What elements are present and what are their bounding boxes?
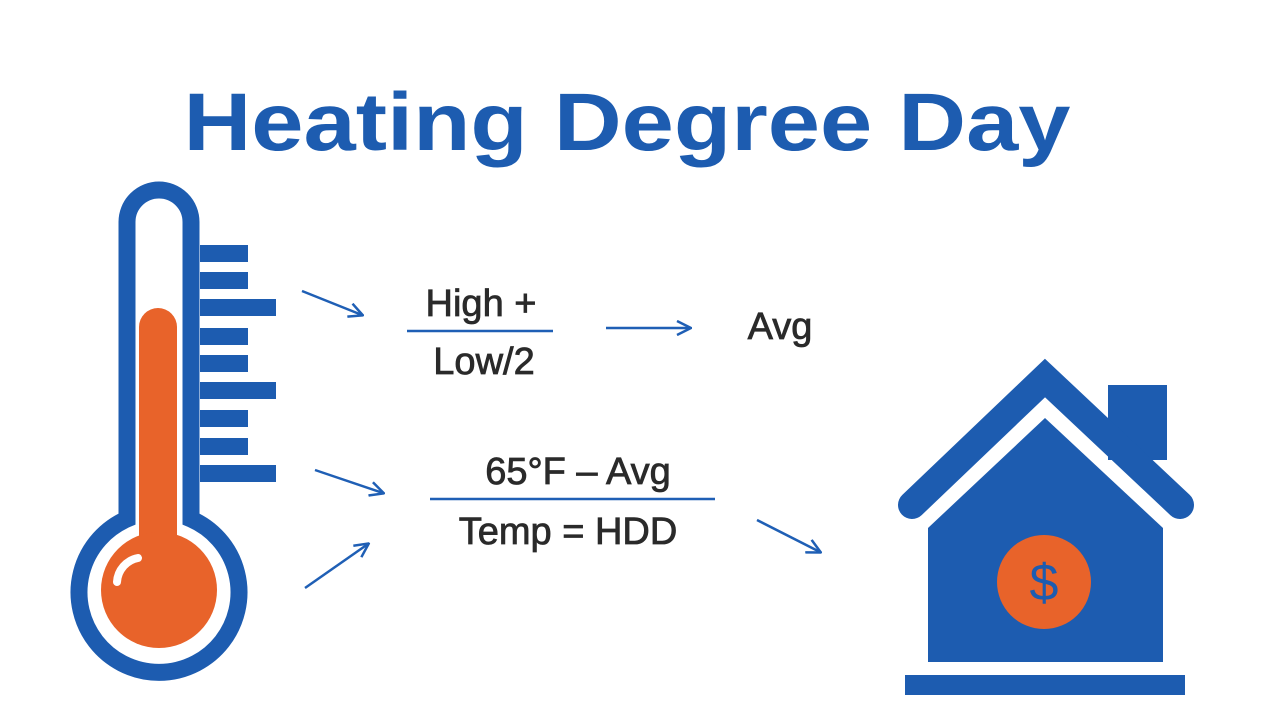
arrow: upper to hdd (315, 470, 383, 493)
formula: average: Low/2 (433, 341, 535, 383)
title: Heating Degree Day (184, 77, 1071, 168)
icon: thermometer (79, 190, 276, 672)
arrow: to high+low (302, 291, 362, 315)
mercury (139, 308, 177, 568)
text: Avg: Avg (748, 306, 812, 348)
formula: average (407, 283, 553, 383)
icon: house with dollar: $ (1030, 554, 1059, 612)
icon: house with dollar (905, 378, 1185, 695)
arrow: lower to hdd (305, 544, 368, 588)
arrow: to avg (606, 327, 690, 329)
arrow: to house (757, 520, 820, 552)
formula: average: High + (426, 283, 536, 325)
formula: HDD: Temp = HDD (459, 511, 677, 553)
dollar coin (997, 535, 1091, 629)
ticks (200, 245, 276, 482)
formula: HDD: 65°F – Avg (485, 451, 671, 493)
formula: HDD (430, 451, 715, 553)
